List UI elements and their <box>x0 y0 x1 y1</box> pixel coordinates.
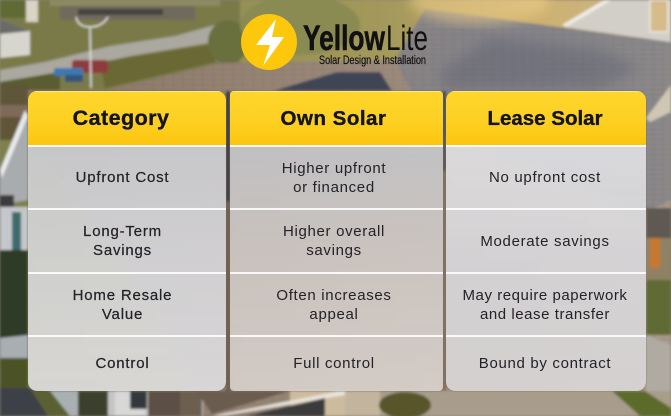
cell: resale, own: appeal <box>309 306 359 322</box>
top left yard <box>0 0 240 90</box>
cell: control, own: Full control <box>293 355 375 372</box>
upper right house <box>566 0 671 42</box>
cell: upfront cost, lease <box>446 145 646 208</box>
cell: savings, own <box>230 208 443 272</box>
lower brown roof bit <box>196 391 290 414</box>
cell: control, lease <box>446 335 646 390</box>
row: Control: Control <box>96 355 149 372</box>
row: Control <box>28 335 226 390</box>
cell: savings, lease: Moderate savings <box>480 232 610 250</box>
cell: resale, lease: and lease transfer <box>480 306 610 322</box>
bottom strip <box>78 391 203 416</box>
cars <box>72 60 108 73</box>
table column: Own Solar <box>230 91 443 391</box>
logo: YellowLite <box>241 14 428 70</box>
shed <box>0 19 30 58</box>
cell: upfront cost, own: or financed <box>293 178 375 196</box>
row: Home Resale Value: Value <box>102 306 143 322</box>
cell: resale, lease <box>446 272 646 335</box>
row: Upfront Cost <box>28 145 226 208</box>
cell: savings, lease <box>446 208 646 272</box>
cell: control, lease: Bound by contract <box>479 355 611 372</box>
cell: upfront cost, own <box>230 145 443 208</box>
cell: resale, own: Often increases <box>276 286 392 304</box>
row: Upfront Cost: Upfront Cost <box>76 169 169 186</box>
row: Home Resale Value <box>28 272 226 335</box>
heading: Category: Category <box>73 106 169 130</box>
gravel <box>380 391 671 416</box>
heading: Lease Solar: Lease Solar <box>487 106 603 130</box>
pole <box>76 17 108 88</box>
cell: control, own <box>230 335 443 390</box>
trees behind logo <box>208 20 248 64</box>
wordmark: Yellow <box>303 19 386 58</box>
gaps between columns <box>226 91 230 201</box>
warm glow <box>410 0 550 24</box>
heading: Category <box>28 91 226 145</box>
lower yard <box>0 72 60 90</box>
row: Long-Term Savings: Savings <box>93 242 152 259</box>
solar sliver <box>273 72 392 91</box>
heading: Own Solar: Own Solar <box>281 106 386 130</box>
road <box>0 25 215 82</box>
icon: lightning bolt badge <box>241 14 297 70</box>
row: Long-Term Savings <box>28 208 226 272</box>
cell: savings, own: Higher overall <box>283 223 385 240</box>
row: Long-Term Savings: Long-Term <box>83 223 162 240</box>
table column: Lease Solar <box>446 91 646 391</box>
row: Home Resale Value: Home Resale <box>73 286 172 304</box>
heading: Own Solar <box>230 91 443 145</box>
right garden <box>646 280 671 335</box>
cell: resale, own <box>230 272 443 335</box>
gray shingles right <box>395 9 671 215</box>
table column: Category <box>28 91 226 391</box>
cell: resale, lease: May require paperwork <box>463 286 627 304</box>
left house <box>0 85 28 140</box>
right edge <box>646 85 671 122</box>
heading: Lease Solar <box>446 91 646 145</box>
cell: upfront cost, own: Higher upfront <box>282 160 386 176</box>
cell: upfront cost, lease: No upfront cost <box>489 169 601 186</box>
left yard <box>0 250 28 338</box>
cell: savings, own: savings <box>306 242 362 259</box>
